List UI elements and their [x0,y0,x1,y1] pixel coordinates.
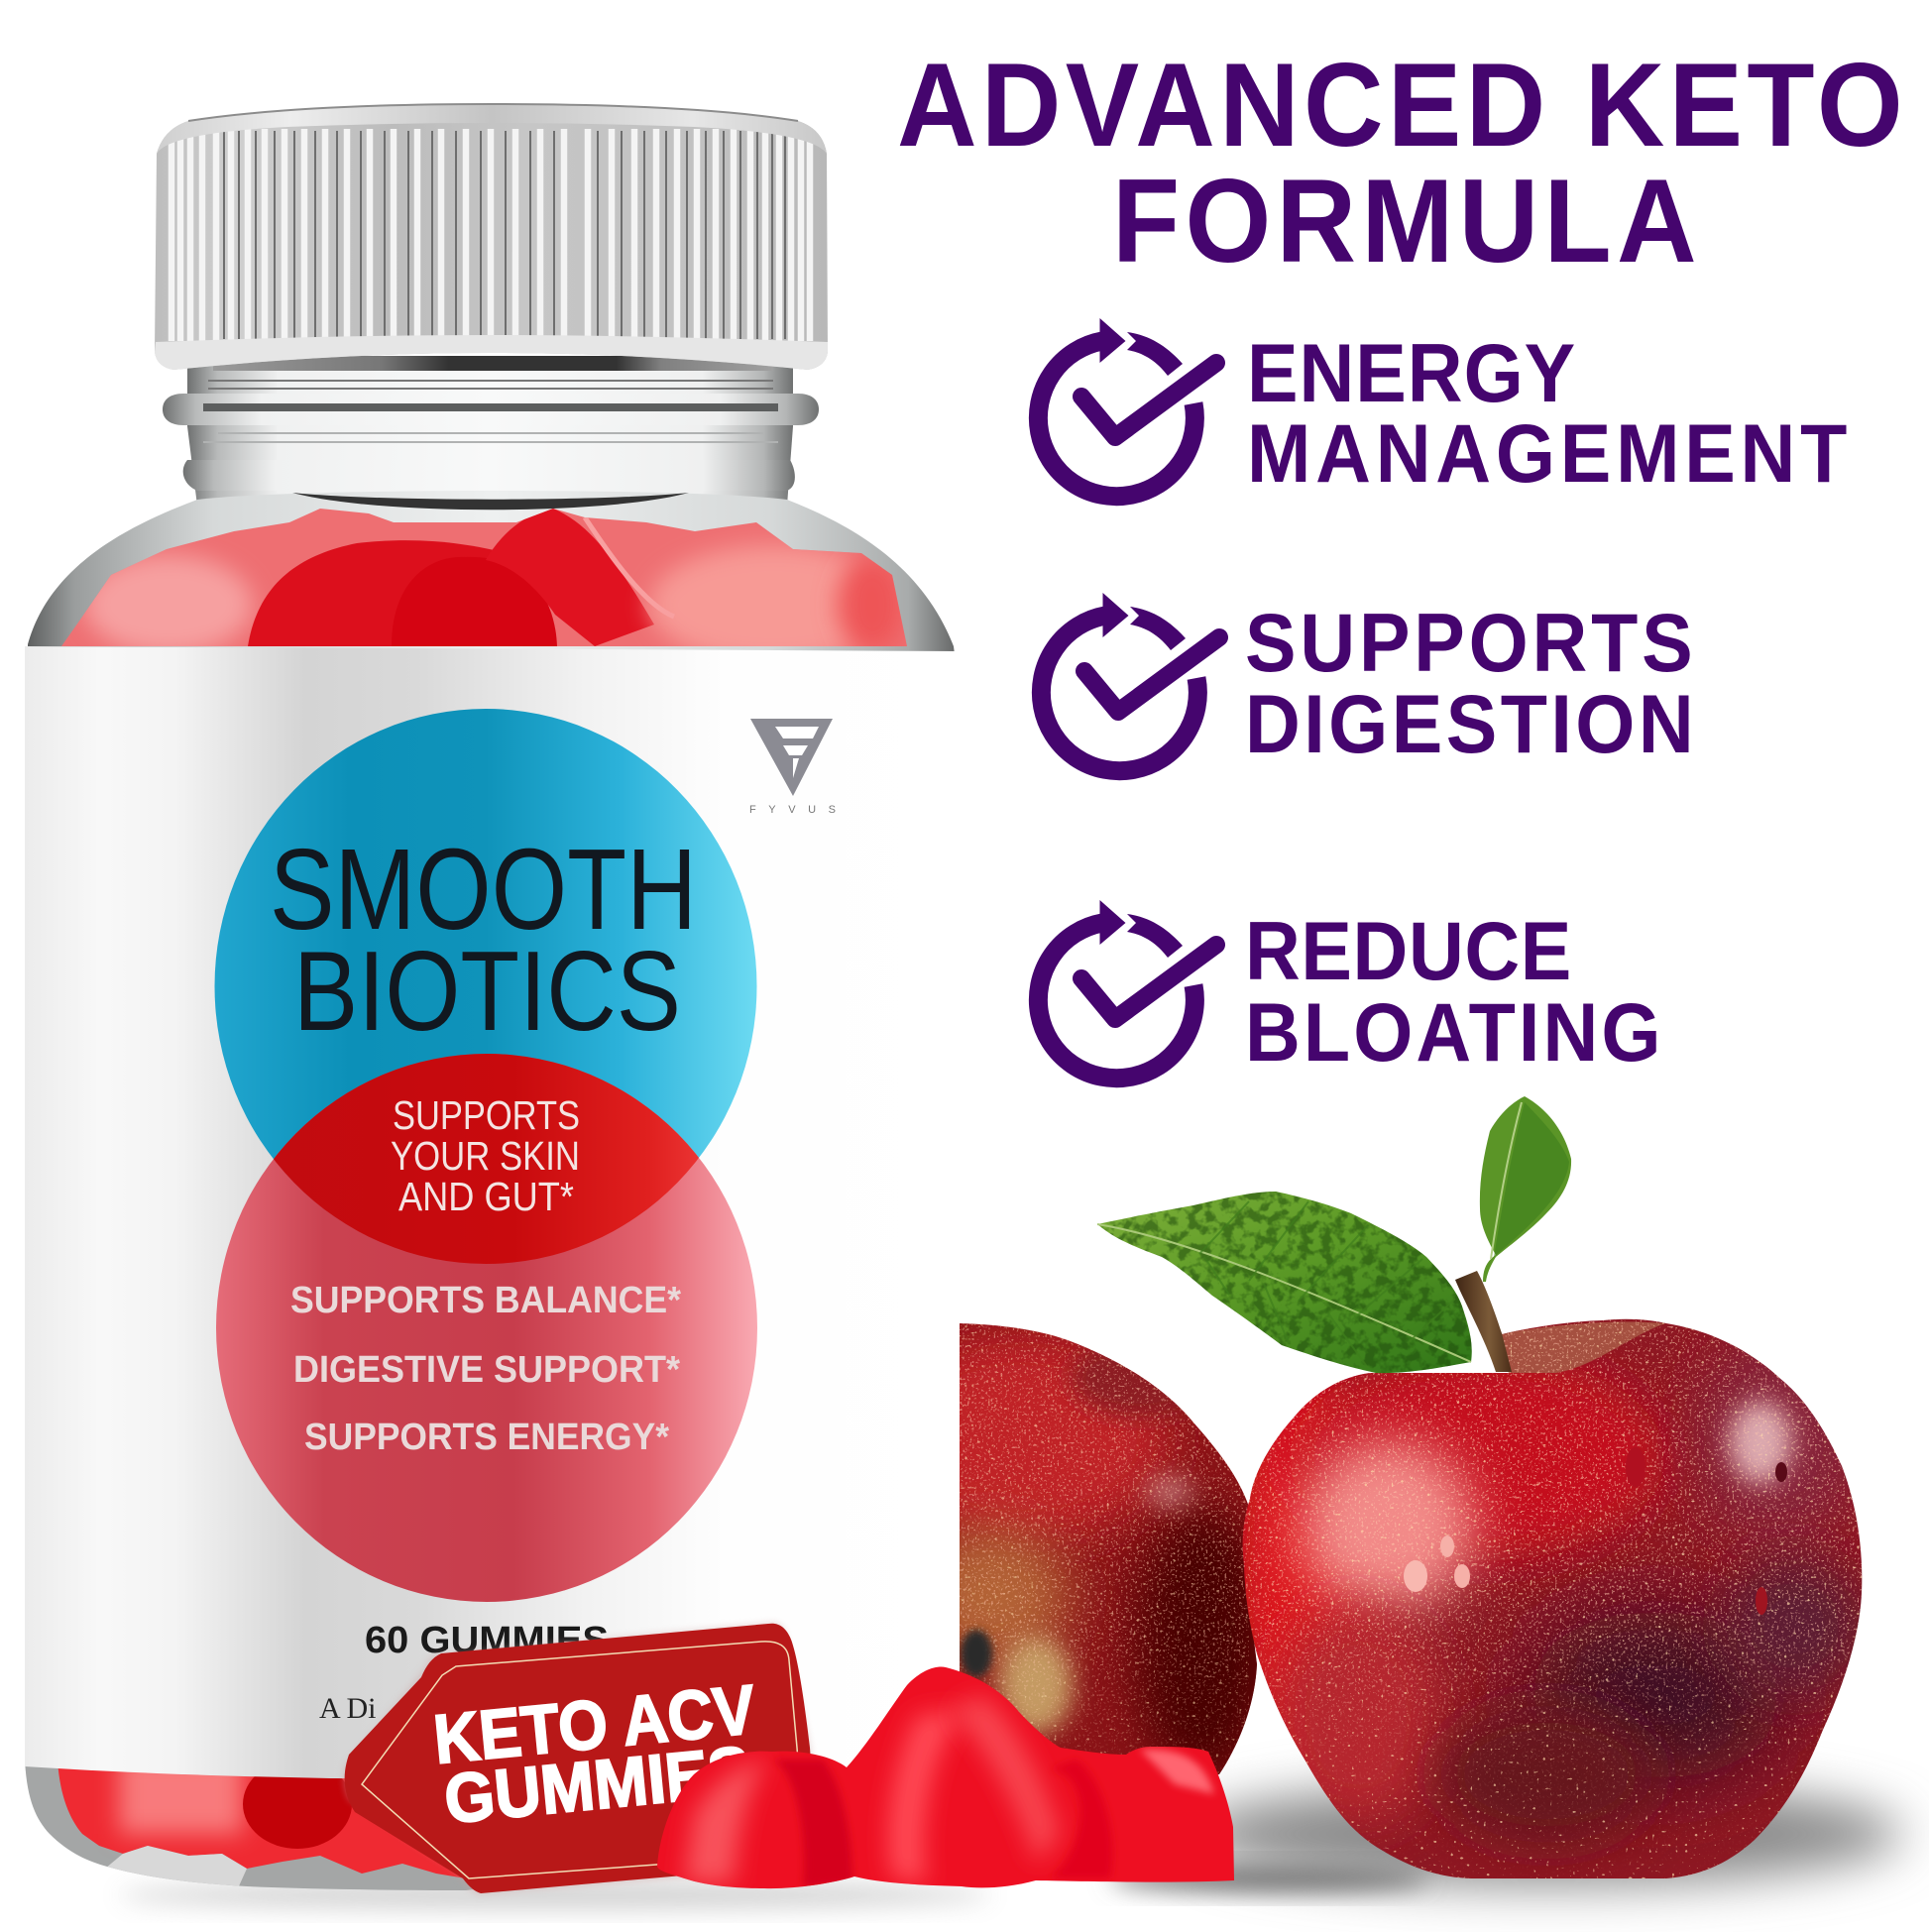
title: ADVANCED KETO [897,38,1903,171]
benefit: energy management [1038,318,1847,501]
benefit label: SUPPORTS [1245,597,1693,690]
bottle [25,104,960,1890]
brand name [270,825,697,1055]
apple body [1229,1308,1873,1893]
benefit label: REDUCE [1245,905,1571,998]
benefit label [1247,327,1847,501]
cap [155,104,828,370]
benefit label: ENERGY [1247,327,1575,420]
benefit label: BLOATING [1245,986,1661,1080]
blue circle [214,709,757,1264]
red tag [344,1624,822,1893]
ground shadows [119,1782,1903,1909]
benefit label: DIGESTION [1245,678,1694,771]
icon: cycle check [1038,318,1216,497]
neck opening lens [292,493,689,510]
lens text: SUPPORTS [393,1092,580,1138]
tag text: GUMMIES [441,1732,754,1838]
benefit label [1245,905,1661,1080]
benefit: supports digestion [1041,593,1694,771]
benefit list on label: SUPPORTS BALANCE* [290,1280,681,1321]
glass shoulder [28,491,955,654]
brand name: BIOTICS [293,929,681,1055]
big leaf [1090,1185,1477,1378]
stem [1455,1271,1512,1372]
gummies in jar [61,509,907,646]
icon: cycle check [1038,900,1216,1079]
brand logo [749,719,836,816]
lens text: AND GUT* [398,1174,574,1219]
tag text: KETO ACV [430,1670,758,1778]
brand logo: FYVUS [749,804,836,816]
benefit list on label: SUPPORTS ENERGY* [304,1417,669,1458]
bottom glass [25,1755,694,1890]
tag text [430,1670,764,1839]
neck glass [163,356,819,506]
overlap lens [274,1054,699,1264]
benefit label: MANAGEMENT [1247,407,1847,501]
benefit label [1245,597,1694,771]
loose gummies [657,1667,1234,1888]
benefit list on label [290,1280,681,1458]
title: FORMULA [1112,154,1697,287]
lens text: YOUR SKIN [391,1133,580,1179]
small leaf [1480,1096,1571,1282]
back apple [960,1323,1257,1774]
benefit: reduce bloating [1038,900,1661,1080]
front apple [1229,1308,1873,1893]
gummies at bottom of jar [57,1768,462,1885]
label [25,646,960,1779]
icon: cycle check [1041,593,1219,771]
title [897,38,1903,287]
lens text [391,1092,580,1219]
count: 60 GUMMIES [365,1620,609,1661]
red circle [216,1054,757,1602]
dietary line: A Di [319,1692,377,1725]
benefit list on label: DIGESTIVE SUPPORT* [293,1349,680,1391]
brand name: SMOOTH [270,825,697,954]
